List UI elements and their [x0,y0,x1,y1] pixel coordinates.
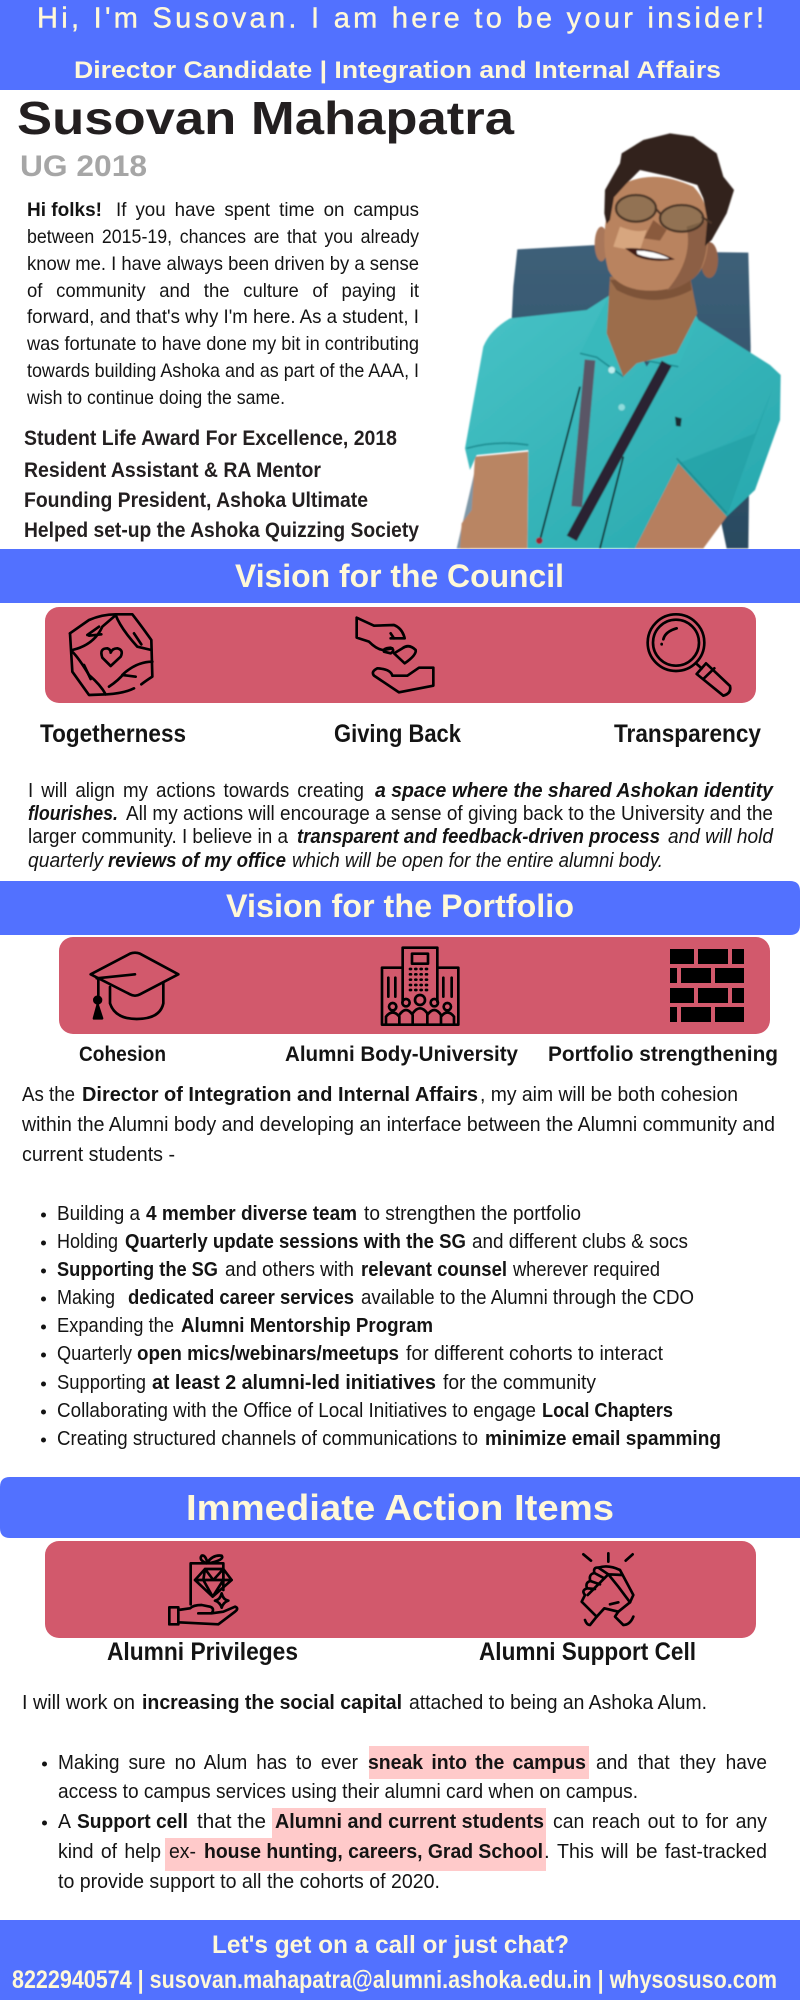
section heading: vision for the portfolio: Vision for the Portfolio [226,888,574,924]
introduction paragraph: Hi folks! [27,199,102,221]
icon: clasped hands [582,1553,633,1625]
portfolio intro paragraph: current students - [22,1143,175,1166]
portfolio bullet list: Supporting [57,1371,146,1394]
shirt [465,295,781,548]
action items bullet list: house hunting, careers, Grad School [204,1840,543,1863]
council vision paragraph: quarterly [28,850,104,872]
ears [595,227,608,261]
panel: portfolio icons [59,937,770,1034]
portfolio bullet list: dedicated career services [128,1286,354,1309]
tagline: Hi, I'm Susovan. I am here to be your insider! [37,2,764,34]
council vision paragraph: a space where the shared Ashokan identity [375,780,774,802]
icon: gift card with diamond in hand [169,1555,237,1624]
council vision paragraph: I will align my actions towards creating [28,780,364,802]
portfolio bullet list: available to the Alumni through the CDO [361,1286,694,1309]
shirt buttons [608,367,615,373]
portfolio bullet list: minimize email spamming [485,1427,721,1450]
action items bullet list: kind of help [58,1840,161,1863]
council vision paragraph: and will hold [668,826,774,848]
section heading: vision for the council [0,549,800,603]
portfolio bullet list: Collaborating with the Office of Local Initiatives to engage [57,1399,536,1422]
council vision paragraph: transparent and feedback-driven process [297,826,660,848]
council vision paragraph: larger community. I believe in a [28,826,289,848]
portfolio bullet list [41,1202,721,1450]
action items intro: attached to being an Ashoka Alum. [409,1691,707,1714]
portfolio bullet list: Creating structured channels of communications to [57,1427,478,1450]
neck [607,277,697,377]
icon: brick wall [670,949,744,1022]
arms [460,452,528,548]
action items bullet list: can reach out to for any [553,1810,768,1833]
action items bullet list: This will be fast-tracked [557,1840,767,1863]
action items bullet list: access to campus services using their alumni card when on campus. [58,1780,638,1803]
lanyard [572,363,667,538]
icon: building with people [382,948,458,1025]
action item labels: Alumni Privileges [107,1638,298,1666]
introduction paragraph: forward, and that's why I'm here. As a student, I [27,306,419,328]
introduction paragraph: wish to continue doing the same. [26,387,285,409]
batch year: UG 2018 [20,150,147,183]
portfolio bullet list: at least 2 alumni-led initiatives [152,1371,436,1394]
portfolio bullet list: Making [57,1286,115,1309]
council value labels: Transparency [614,720,761,748]
text highlights [165,1746,589,1871]
action item labels: Alumni Support Cell [479,1638,696,1666]
section heading: immediate action items [0,1477,800,1538]
portfolio bullet list: and different clubs & socs [472,1230,688,1253]
council vision paragraph [28,780,774,872]
action items bullet list: Making sure no Alum has to ever [58,1751,358,1774]
candidate role: Director Candidate | Integration and Internal Affairs [74,57,721,84]
panel: action item icons [45,1541,756,1638]
portrait illustration [457,133,781,548]
introduction paragraph: of community and the culture of paying it [27,280,420,302]
council vision paragraph: which will be open for the entire alumni body. [292,850,663,872]
portfolio bullet list: Holding [57,1230,118,1253]
portfolio intro paragraph [21,1083,775,1166]
introduction paragraph: If you have spent time on campus [116,199,419,221]
council vision paragraph: flourishes. [28,803,118,825]
icon: magnifying glass [648,614,730,696]
call to action: Let's get on a call or just chat? [212,1931,569,1959]
portfolio bullet list: for different cohorts to interact [406,1342,663,1365]
portfolio labels: Cohesion [79,1043,166,1066]
achievements list: Helped set-up the Ashoka Quizzing Society [24,519,419,542]
portfolio bullet list: Building a [57,1202,141,1225]
portfolio intro paragraph: , my aim will be both cohesion [480,1083,738,1106]
header banner [0,0,800,90]
portfolio bullet list: open mics/webinars/meetups [137,1342,399,1365]
icon: giving back [357,618,433,692]
portfolio intro paragraph: Director of Integration and Internal Affairs [82,1083,478,1106]
portfolio intro paragraph: As the [22,1083,75,1106]
introduction paragraph: between 2015-19, chances are that you already [27,226,419,248]
action items bullet list: and that they have [596,1751,767,1774]
action items bullet list: . [544,1840,550,1863]
introduction paragraph: was fortunate to have done my bit in contributing [26,333,419,355]
section heading: vision for the portfolio [0,881,800,935]
action items bullet list [42,1746,768,1893]
action items bullet list: A [58,1810,71,1833]
introduction paragraph: towards building Ashoka and as part of the AAA, I [27,360,419,382]
action items intro: increasing the social capital [142,1691,402,1714]
portfolio bullet list: Supporting the SG [57,1258,218,1281]
portfolio labels [79,1043,778,1066]
portfolio bullet list: to strengthen the portfolio [364,1202,581,1225]
icon: togetherness hands and heart [70,614,152,695]
achievements list: Founding President, Ashoka Ultimate [24,489,368,512]
action items bullet list: Alumni and current students [275,1810,544,1833]
action items bullet list: Support cell [77,1810,188,1833]
portfolio bullet list: Alumni Mentorship Program [181,1314,433,1337]
hair [604,133,734,246]
action items bullet list: sneak into the campus [368,1751,586,1774]
portfolio bullet list: Quarterly update sessions with the SG [125,1230,466,1253]
section heading: vision for the council: Vision for the Council [235,558,564,594]
council value labels: Togetherness [40,720,186,748]
portfolio bullet list: relevant counsel [361,1258,507,1281]
portfolio bullet list: Quarterly [57,1342,133,1365]
portfolio bullet list: and others with [225,1258,354,1281]
nose [644,220,667,241]
portfolio bullet list: wherever required [512,1258,660,1281]
portfolio bullet list: for the community [443,1371,597,1394]
action items intro [22,1691,707,1714]
council value labels: Giving Back [334,720,461,748]
chair [512,245,751,548]
portfolio bullet list: Local Chapters [542,1399,673,1422]
portfolio labels: Alumni Body-University [285,1043,518,1066]
portfolio bullet list: Expanding the [57,1314,174,1337]
portfolio intro paragraph: within the Alumni body and developing an interface between the Alumni community and [21,1113,775,1136]
council value labels [40,720,761,748]
section heading: immediate action items: Immediate Action Items [186,1487,614,1528]
face [604,177,708,291]
council vision paragraph: reviews of my office [108,850,286,872]
portfolio bullet list: 4 member diverse team [146,1202,357,1225]
achievements list: Resident Assistant & RA Mentor [24,459,321,482]
action items bullet list: to provide support to all the cohorts of 2020. [58,1870,440,1893]
glasses [616,195,712,232]
introduction paragraph [26,199,420,409]
achievements list [24,427,419,542]
introduction paragraph: know me. I have always been driven by a sense [27,253,419,275]
action items intro: I will work on [22,1691,135,1714]
action item labels [107,1638,696,1666]
panel: council values icons [45,607,756,703]
council vision paragraph: All my actions will encourage a sense of giving back to the University and the [126,803,773,825]
action items bullet list: ex- [169,1840,196,1863]
achievements list: Student Life Award For Excellence, 2018 [24,427,397,450]
candidate name: Susovan Mahapatra [17,92,514,144]
action items bullet list: that the [197,1810,266,1833]
icon: graduation cap [91,953,178,1019]
portfolio labels: Portfolio strengthening [548,1043,778,1066]
footer contact banner [0,1920,800,2000]
mouth [625,248,675,261]
